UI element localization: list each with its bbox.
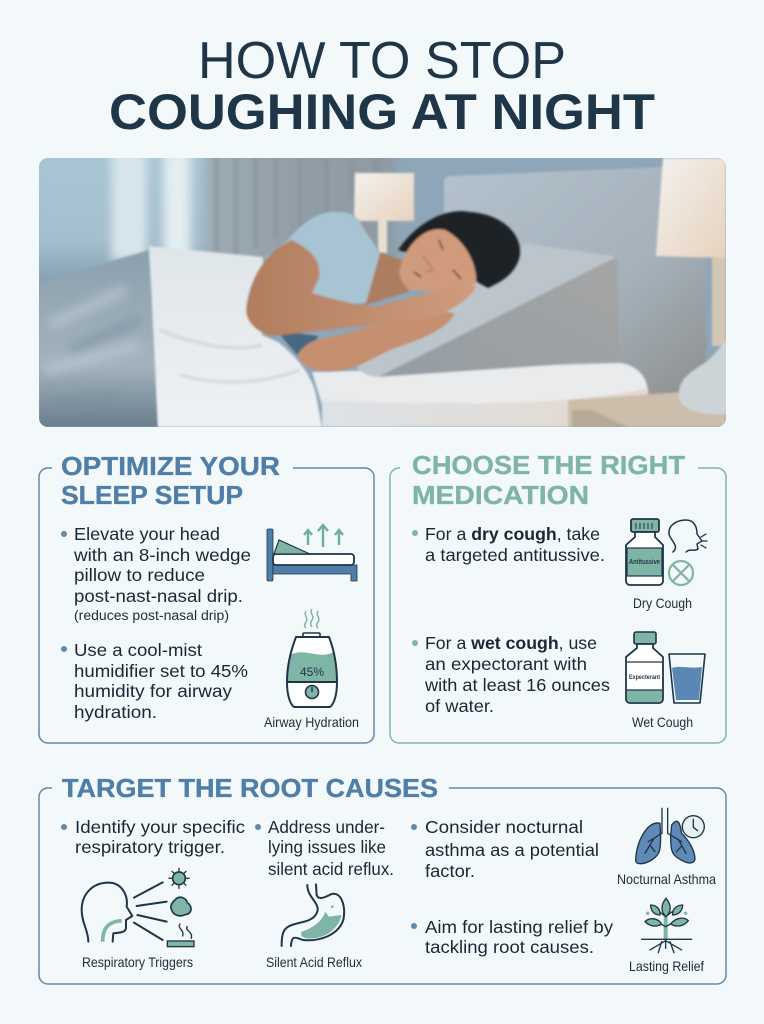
icon: tree with roots xyxy=(642,898,692,953)
heading: optimize your sleep setup: OPTIMIZE YOUR xyxy=(61,451,280,481)
icon: elevated bed xyxy=(267,525,357,581)
bullet: dry cough: a targeted antitussive. xyxy=(425,545,605,565)
heading: target the root causes: TARGET THE ROOT CAUSES xyxy=(62,773,438,803)
wedge pillow xyxy=(356,244,614,377)
bullet: dry cough xyxy=(412,524,605,565)
heading: choose the right medication: MEDICATION xyxy=(412,480,589,510)
icon: expectorant bottle xyxy=(626,632,663,703)
icon: respiratory triggers xyxy=(82,868,194,947)
face xyxy=(400,229,476,292)
title: HOW TO STOP xyxy=(198,32,566,90)
bullet: wet cough xyxy=(412,633,610,716)
label: nocturnal asthma: Nocturnal Asthma xyxy=(617,871,716,887)
title: COUGHING AT NIGHT xyxy=(109,84,655,140)
icon: coughing head xyxy=(669,520,707,552)
label: lasting relief: Lasting Relief xyxy=(629,958,704,974)
bullet: cool-mist humidifier: Use a cool-mist xyxy=(74,640,202,660)
bullet: nocturnal asthma: Consider nocturnal xyxy=(425,817,583,837)
nightstand xyxy=(568,392,726,427)
arms and hands xyxy=(298,307,455,371)
icon: expectorant bottle: Expecterant xyxy=(629,674,661,681)
label: airway hydration: Airway Hydration xyxy=(264,714,359,730)
title xyxy=(109,32,655,140)
bedside lamp xyxy=(712,258,726,346)
heading: optimize your sleep setup: SLEEP SETUP xyxy=(61,480,243,510)
bullet: respiratory trigger: respiratory trigger. xyxy=(75,837,225,857)
bullet: cool-mist humidifier xyxy=(61,640,248,722)
neck and chest xyxy=(362,250,408,306)
icon: humidifier: 45% xyxy=(300,665,324,679)
icon: stomach with acid reflux xyxy=(282,884,344,946)
heading: choose the right medication: CHOOSE THE RIGHT xyxy=(412,450,685,480)
bullet: dry cough: For a dry cough, take xyxy=(425,524,600,544)
label: silent acid reflux: Silent Acid Reflux xyxy=(266,954,362,970)
bullet: lasting relief: tackling root causes. xyxy=(425,937,594,957)
icon: humidifier xyxy=(287,609,337,707)
heading: choose the right medication xyxy=(412,450,685,510)
panel: target the root causes xyxy=(39,773,726,984)
panel: choose the right medication xyxy=(390,450,726,743)
bullet: nocturnal asthma: factor. xyxy=(425,861,475,881)
bullet: wet cough: of water. xyxy=(425,696,494,716)
bullet: elevate your head: post-nast-nasal drip. xyxy=(74,586,243,606)
bullet: respiratory trigger xyxy=(61,817,245,857)
bullet: acid reflux: silent acid reflux. xyxy=(268,859,394,879)
label: wet cough: Wet Cough xyxy=(632,714,693,730)
bullet: cool-mist humidifier: humidity for airway xyxy=(74,681,232,701)
bullet: wet cough: For a wet cough, use xyxy=(425,633,597,653)
panel: optimize your sleep setup xyxy=(39,451,374,743)
shirt xyxy=(265,212,380,306)
bullet: cool-mist humidifier: humidifier set to 45% xyxy=(74,661,248,681)
dark undershirt xyxy=(280,332,318,356)
icon: no-cough symbol xyxy=(669,561,693,585)
bullet: nocturnal asthma: asthma as a potential xyxy=(425,840,599,860)
bullet: elevate your head: (reduces post-nasal drip) xyxy=(74,608,229,623)
heading: optimize your sleep setup xyxy=(61,451,280,510)
bullet: elevate your head xyxy=(61,524,251,623)
mattress xyxy=(312,363,648,405)
bullet: acid reflux: Address under- xyxy=(268,817,385,837)
bullet: elevate your head: Elevate your head xyxy=(74,524,220,544)
hair back xyxy=(398,211,520,288)
label: dry cough: Dry Cough xyxy=(633,595,692,611)
bullet: lasting relief: Aim for lasting relief by xyxy=(425,917,613,937)
bullet: wet cough: an expectorant with xyxy=(425,654,587,674)
bullet: respiratory trigger: Identify your specific xyxy=(75,817,245,837)
wall lamp xyxy=(378,221,387,253)
icon: antitussive bottle: Antitussive xyxy=(629,559,660,566)
label: respiratory triggers: Respiratory Triggers xyxy=(82,954,193,970)
bullet: wet cough: with at least 16 ounces xyxy=(424,675,610,695)
bullet: elevate your head: with an 8-inch wedge xyxy=(73,545,251,565)
icon: antitussive bottle xyxy=(626,519,663,585)
grey blanket xyxy=(39,250,158,427)
icon: glass of water xyxy=(669,654,705,703)
headboard xyxy=(444,167,706,395)
bullet: elevate your head: pillow to reduce xyxy=(74,565,205,585)
photo: woman sleeping on a wedge pillow xyxy=(30,150,728,427)
bullet: acid reflux xyxy=(255,817,394,879)
bullet: acid reflux: lying issues like xyxy=(268,837,386,857)
bullet: lasting relief xyxy=(411,917,613,957)
bullet: nocturnal asthma xyxy=(411,817,599,881)
bullet: cool-mist humidifier: hydration. xyxy=(74,702,157,722)
icon: lungs with clock xyxy=(636,808,704,864)
white duvet xyxy=(149,246,322,427)
